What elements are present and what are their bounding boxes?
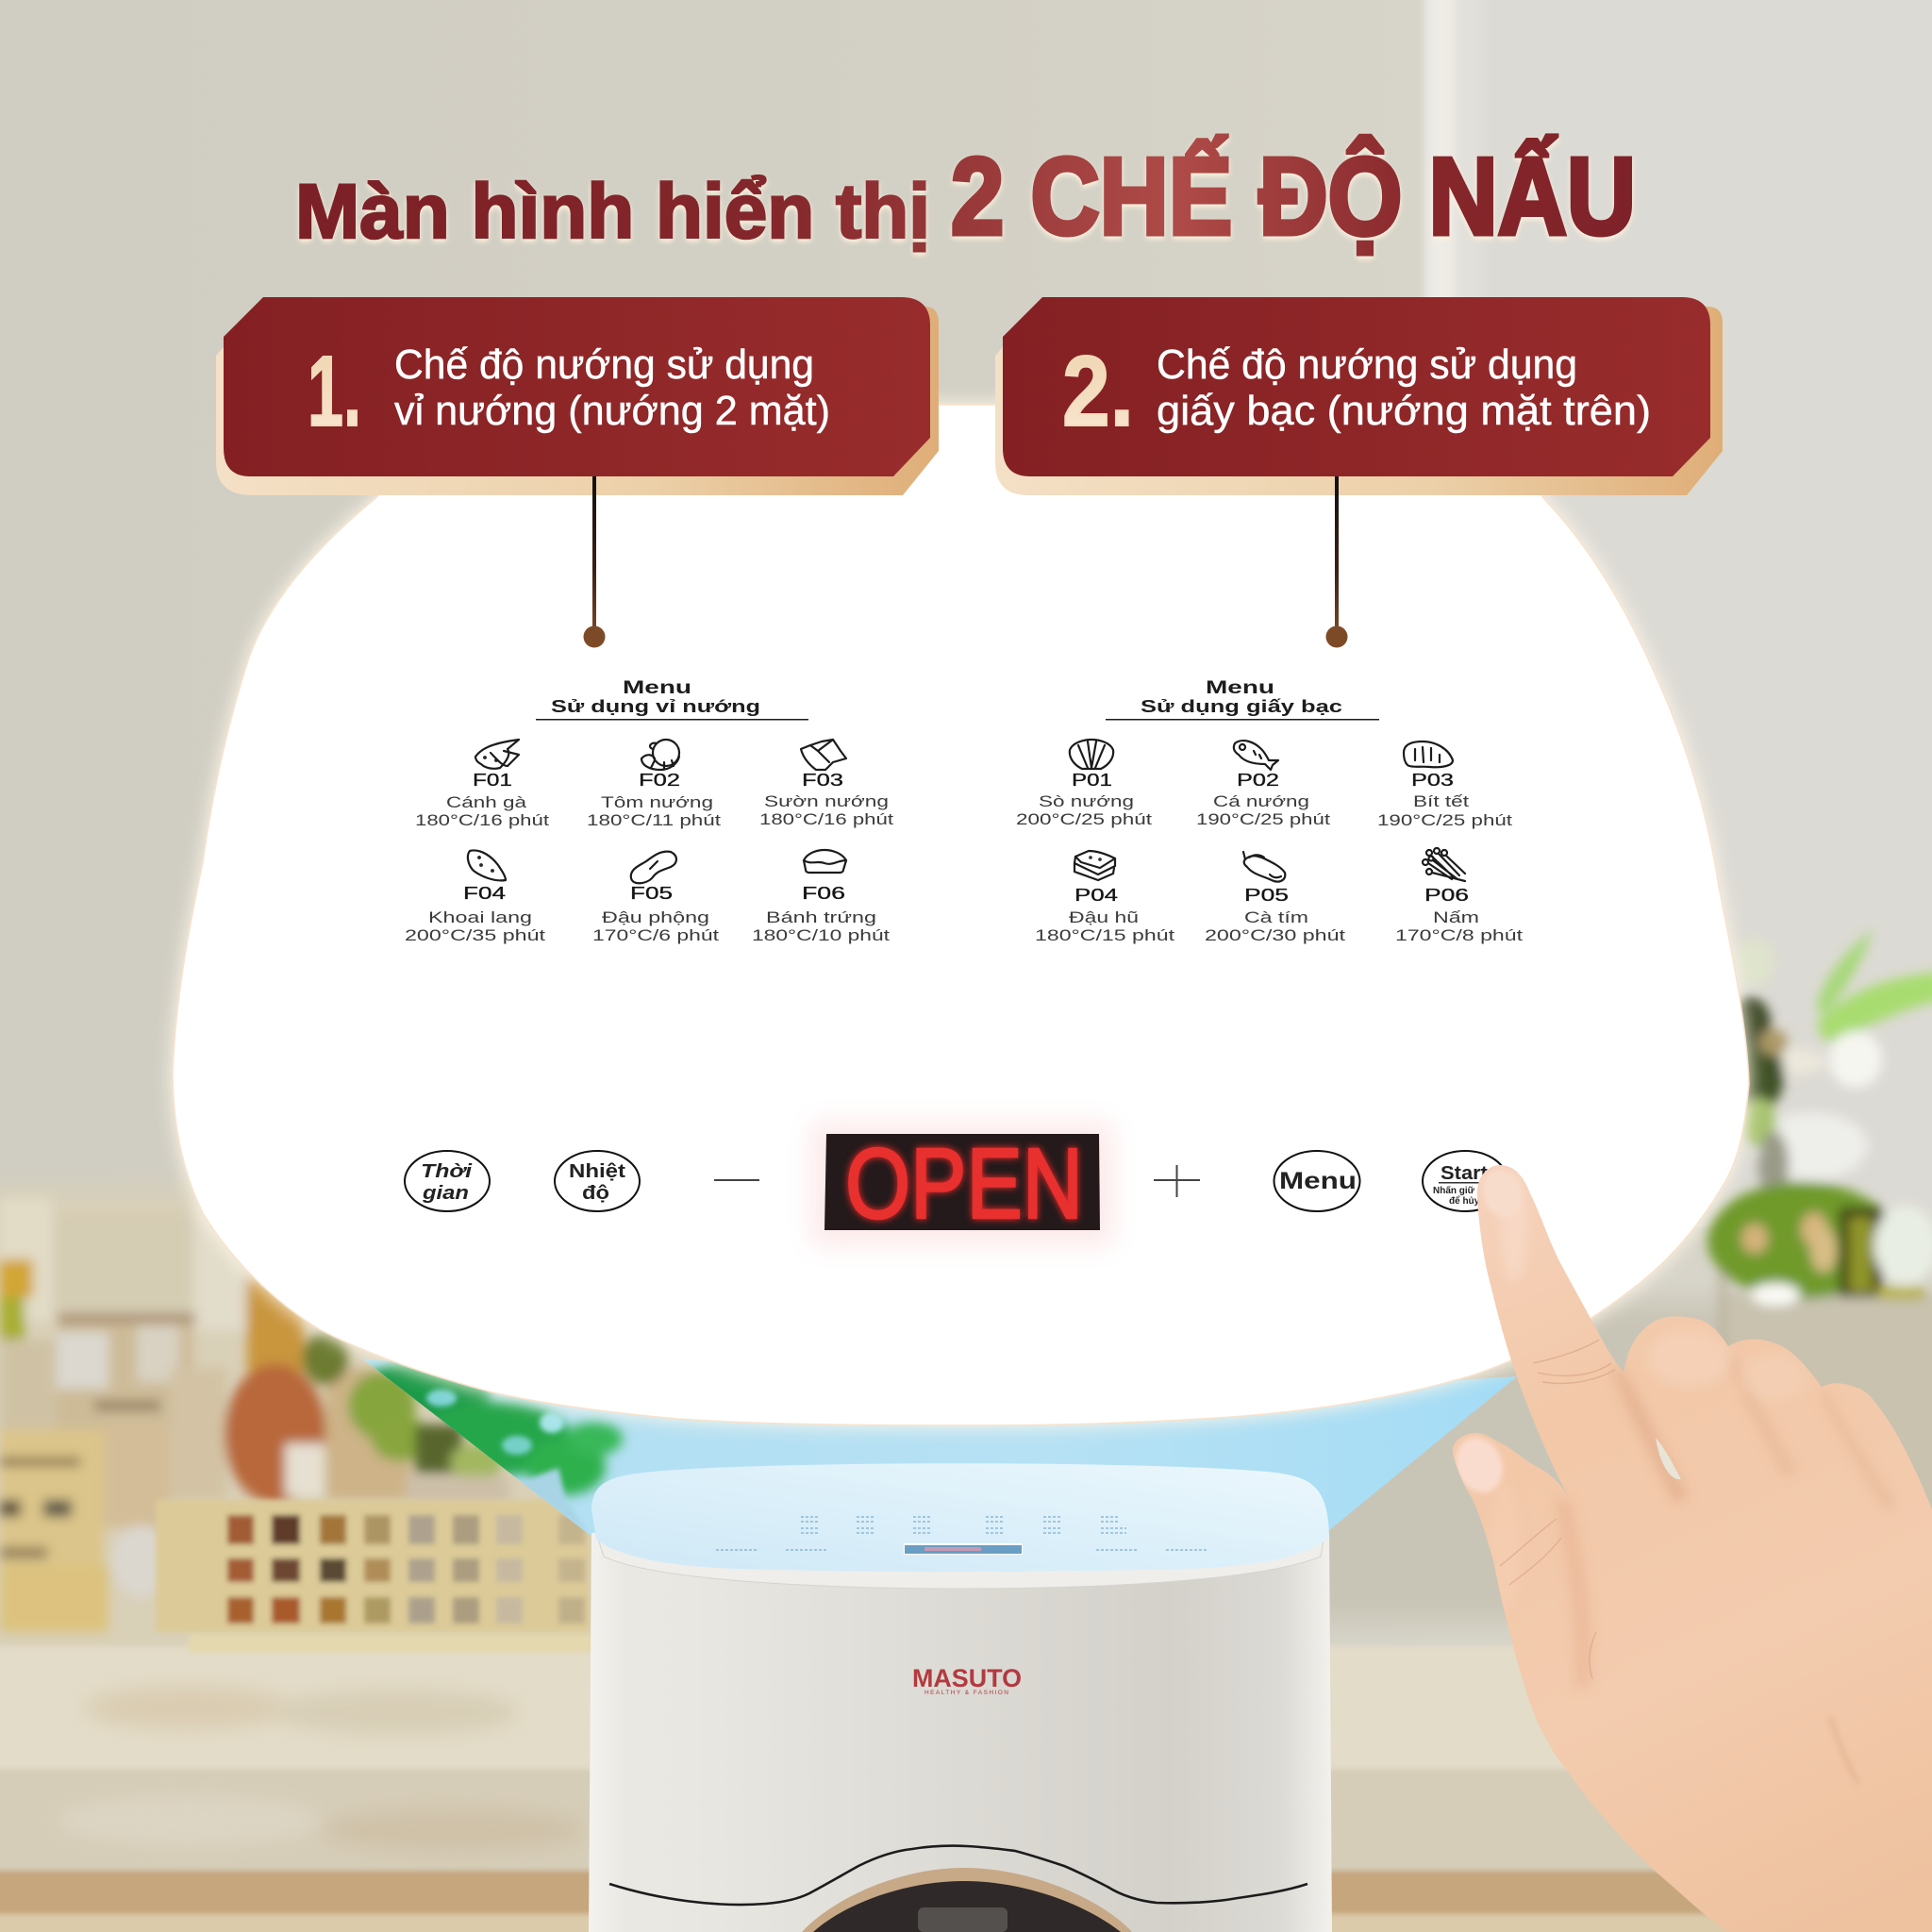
fryer logo: HEALTHY & FASHION bbox=[924, 1690, 1008, 1696]
P05 label: 200°C/30 phút bbox=[1205, 927, 1346, 944]
F03 ribs bbox=[801, 740, 846, 770]
P05 label bbox=[1205, 886, 1346, 944]
P02 label: Cá nướng bbox=[1213, 793, 1309, 810]
banner 2: foil mode bbox=[995, 297, 1723, 495]
minus button bbox=[714, 1179, 759, 1181]
gap between fingers bbox=[1656, 1438, 1681, 1479]
title: Màn hình hiển thị bbox=[295, 169, 930, 255]
F02 label: F02 bbox=[639, 771, 680, 790]
P01 label: 200°C/25 phút bbox=[1016, 811, 1153, 828]
button: time: gian bbox=[422, 1183, 469, 1204]
P02 label: P02 bbox=[1237, 771, 1279, 790]
pointer 1 bbox=[583, 476, 606, 647]
button: start: để hủy bbox=[1449, 1195, 1480, 1207]
F02 label: 180°C/11 phút bbox=[587, 812, 722, 829]
banner 2 number: 2. bbox=[1062, 336, 1134, 447]
P02 label bbox=[1196, 771, 1331, 828]
F01 label: 180°C/16 phút bbox=[415, 812, 550, 829]
fryer seam bbox=[609, 1846, 1307, 1905]
F02 shrimp bbox=[641, 740, 679, 770]
F03 label: Sườn nướng bbox=[764, 793, 889, 810]
button: temperature bbox=[555, 1151, 640, 1211]
banner 1 number: 1. bbox=[308, 336, 361, 447]
F06 label: F06 bbox=[802, 884, 845, 903]
P06 mushrooms bbox=[1423, 848, 1465, 881]
F01 label: Cánh gà bbox=[446, 794, 527, 811]
fryer door ring bbox=[802, 1868, 1132, 1932]
P05 eggplant bbox=[1243, 852, 1285, 882]
F05 peanut bbox=[631, 852, 676, 883]
P04 label bbox=[1035, 886, 1175, 944]
F04 label: 200°C/35 phút bbox=[405, 927, 546, 944]
P06 label bbox=[1395, 886, 1524, 944]
P03 label: 190°C/25 phút bbox=[1377, 812, 1513, 829]
air fryer bbox=[589, 1463, 1332, 1932]
P03 label: Bít tết bbox=[1413, 793, 1470, 810]
fryer mini display bbox=[904, 1543, 1023, 1555]
P05 label: Cà tím bbox=[1244, 909, 1308, 926]
button: start: Start bbox=[1441, 1163, 1488, 1184]
menu: grill rack bbox=[405, 678, 894, 944]
F03 label: 180°C/16 phút bbox=[759, 811, 894, 828]
P04 label: Đậu hũ bbox=[1069, 909, 1139, 926]
title: 2 CHẾ ĐỘ NẤU bbox=[951, 134, 1636, 258]
fryer body bbox=[589, 1533, 1332, 1932]
banner 1 text bbox=[394, 341, 830, 434]
fryer glass top bbox=[591, 1463, 1329, 1572]
button: menu bbox=[1274, 1151, 1360, 1211]
button: temperature: Nhiệt bbox=[569, 1161, 625, 1182]
F04 label bbox=[405, 884, 546, 944]
F01 wings bbox=[475, 740, 519, 769]
F05 label: 170°C/6 phút bbox=[592, 927, 720, 944]
white display panel bbox=[173, 405, 1749, 1425]
P06 label: P06 bbox=[1424, 886, 1469, 905]
F04 label: F04 bbox=[463, 884, 506, 903]
F06 egg tart bbox=[804, 850, 846, 873]
P01 label bbox=[1016, 771, 1153, 828]
P04 label: P04 bbox=[1074, 886, 1118, 905]
menu heading left: Menu bbox=[623, 678, 691, 698]
P03 label bbox=[1377, 771, 1513, 829]
title bbox=[295, 134, 1636, 258]
banner 1 text: Chế độ nướng sử dụng bbox=[394, 341, 814, 388]
menu heading left bbox=[536, 678, 808, 721]
P01 shell bbox=[1070, 740, 1113, 769]
plus button bbox=[1154, 1165, 1200, 1197]
F03 label: F03 bbox=[802, 771, 843, 790]
hand pointing at start bbox=[1448, 1164, 1932, 1932]
menu heading right: Sử dụng giấy bạc bbox=[1141, 697, 1342, 716]
menu: foil bbox=[1016, 678, 1524, 944]
banner 1 text: vỉ nướng (nướng 2 mặt) bbox=[394, 388, 830, 434]
P02 fish bbox=[1234, 741, 1278, 770]
menu heading right bbox=[1106, 678, 1379, 721]
blue projection beam bbox=[358, 1358, 1517, 1535]
P01 label: P01 bbox=[1072, 771, 1112, 790]
F01 label bbox=[415, 771, 550, 829]
F06 label: 180°C/10 phút bbox=[752, 927, 891, 944]
F01 label: F01 bbox=[473, 771, 512, 790]
LED display: OPEN bbox=[845, 1128, 1083, 1240]
pointer 2 bbox=[1326, 476, 1347, 647]
P03 steak bbox=[1404, 741, 1453, 767]
button: temperature: độ bbox=[582, 1183, 609, 1204]
F04 sweet potato bbox=[468, 850, 506, 880]
P01 label: Sò nướng bbox=[1039, 793, 1134, 810]
P02 label: 190°C/25 phút bbox=[1196, 811, 1331, 828]
banner 2 text: Chế độ nướng sử dụng bbox=[1157, 341, 1577, 388]
menu heading right: Menu bbox=[1206, 678, 1274, 698]
button: time bbox=[405, 1151, 490, 1211]
F05 label bbox=[592, 884, 720, 944]
button: start: Nhấn giữ bbox=[1433, 1185, 1475, 1196]
P06 label: Nấm bbox=[1433, 909, 1479, 926]
F05 label: Đậu phộng bbox=[602, 909, 709, 926]
P03 label: P03 bbox=[1411, 771, 1454, 790]
P04 tofu bbox=[1074, 851, 1115, 880]
F04 label: Khoai lang bbox=[428, 909, 532, 926]
F06 label bbox=[752, 884, 891, 944]
button: time: Thời bbox=[421, 1161, 473, 1182]
F06 label: Bánh trứng bbox=[766, 909, 876, 926]
P05 label: P05 bbox=[1244, 886, 1289, 905]
banner 2 text bbox=[1157, 341, 1651, 434]
fryer panel icons bbox=[716, 1517, 1208, 1550]
banner 2 text: giấy bạc (nướng mặt trên) bbox=[1157, 388, 1651, 434]
button: menu: Menu bbox=[1279, 1168, 1357, 1194]
fryer collar bbox=[596, 1533, 1324, 1589]
button: start bbox=[1423, 1151, 1507, 1211]
P06 label: 170°C/8 phút bbox=[1395, 927, 1524, 944]
F03 label bbox=[759, 771, 894, 828]
menu heading left: Sử dụng vỉ nướng bbox=[551, 697, 760, 716]
banner 1: grill rack mode bbox=[216, 297, 939, 495]
F02 label: Tôm nướng bbox=[601, 794, 713, 811]
F05 label: F05 bbox=[630, 884, 673, 903]
F02 label bbox=[587, 771, 722, 829]
fryer logo: MASUTO bbox=[912, 1664, 1022, 1692]
P04 label: 180°C/15 phút bbox=[1035, 927, 1175, 944]
